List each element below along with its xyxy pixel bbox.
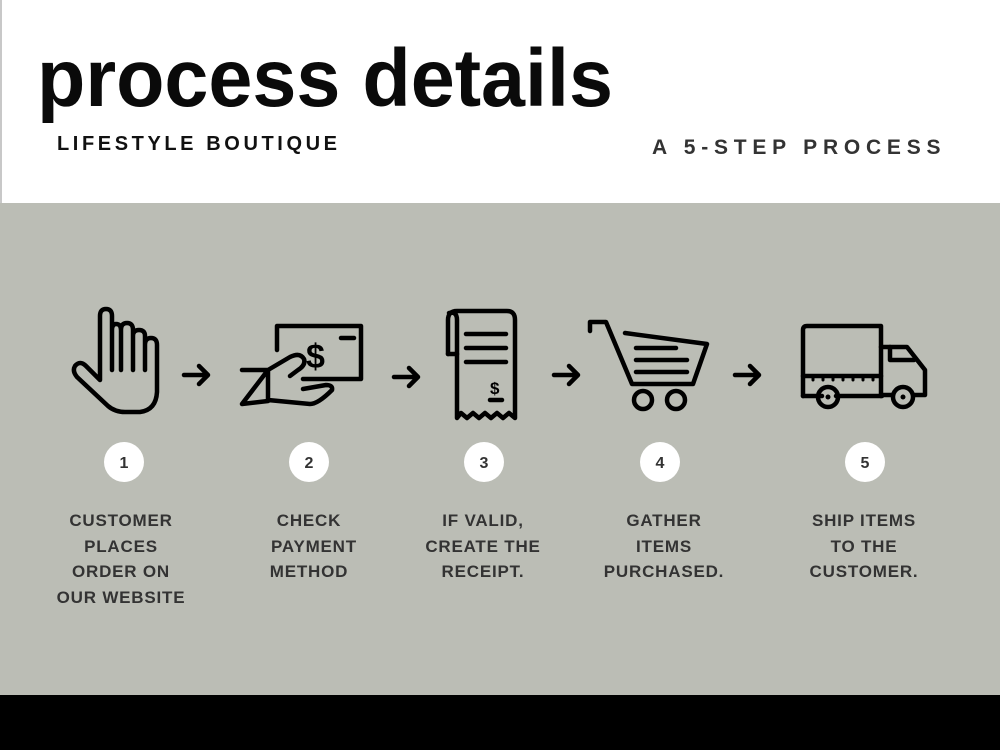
icon: receipt bbox=[448, 311, 515, 418]
step number circles bbox=[104, 442, 885, 482]
step 2 text: CHECK bbox=[277, 511, 341, 530]
step 2 text: PAYMENT bbox=[271, 537, 357, 556]
step 1 text: OUR WEBSITE bbox=[57, 588, 185, 607]
icon: receipt: $ bbox=[490, 379, 500, 398]
step 4 text: GATHER bbox=[626, 511, 702, 530]
text: 3 bbox=[480, 455, 489, 472]
step 1 text: CUSTOMER bbox=[69, 511, 173, 530]
step 5 text: TO THE bbox=[831, 537, 897, 556]
step 3 text bbox=[425, 511, 541, 581]
subtitle: lifestyle boutique: LIFESTYLE BOUTIQUE bbox=[57, 133, 340, 155]
step 2 text bbox=[270, 511, 357, 581]
step 1 text: PLACES bbox=[84, 537, 158, 556]
arrow 1 bbox=[184, 366, 208, 384]
icon: hand with cash bbox=[242, 326, 361, 404]
step 4 text bbox=[604, 511, 724, 581]
arrow 2 bbox=[394, 368, 418, 386]
subtitle: a 5-step process: A 5-STEP PROCESS bbox=[652, 136, 944, 159]
gray panel bbox=[0, 203, 1000, 695]
step 5 text: CUSTOMER. bbox=[810, 562, 918, 581]
step 4 text: PURCHASED. bbox=[604, 562, 724, 581]
icon: delivery truck bbox=[803, 326, 925, 407]
black footer bar bbox=[0, 695, 1000, 750]
step 3 text: IF VALID, bbox=[442, 511, 524, 530]
title: process details bbox=[37, 33, 613, 124]
step 3 text: CREATE THE bbox=[425, 537, 541, 556]
icon: shopping cart bbox=[590, 322, 707, 409]
step 5 text: SHIP ITEMS bbox=[812, 511, 916, 530]
text: 5 bbox=[861, 455, 870, 472]
arrow 3 bbox=[554, 366, 578, 384]
text: 4 bbox=[656, 455, 665, 472]
step 3 text: RECEIPT. bbox=[442, 562, 524, 581]
step 1 text: ORDER ON bbox=[72, 562, 170, 581]
step 1 text bbox=[57, 511, 185, 607]
text: 1 bbox=[120, 455, 129, 472]
icon: pointing hand bbox=[74, 309, 157, 412]
step 5 text bbox=[810, 511, 918, 581]
text: 2 bbox=[305, 455, 314, 472]
step labels bbox=[57, 511, 918, 607]
step 4 text: ITEMS bbox=[636, 537, 692, 556]
icon: hand with cash: $ bbox=[306, 338, 325, 376]
arrow 4 bbox=[735, 366, 759, 384]
step 2 text: METHOD bbox=[270, 562, 348, 581]
